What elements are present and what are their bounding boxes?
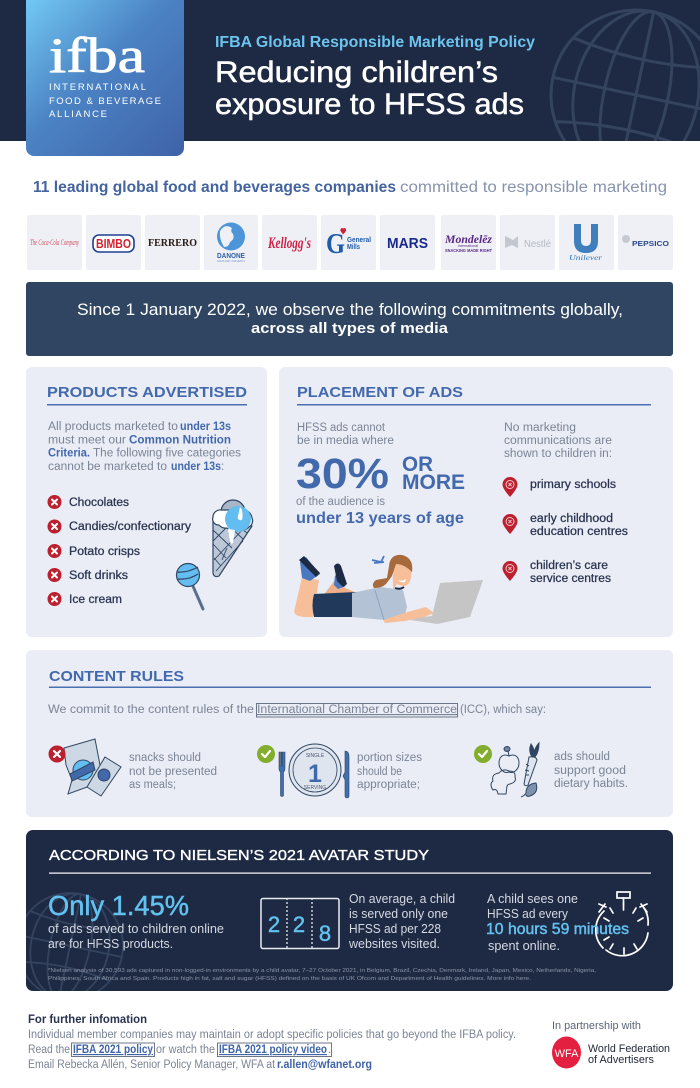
- venues intro: communications are: [504, 435, 612, 447]
- venue: children's care service centres: [502, 560, 611, 585]
- further information: [28, 1014, 516, 1071]
- intro line: [33, 179, 667, 196]
- rule: snacks: snacks should: [129, 752, 201, 764]
- title: [215, 56, 524, 121]
- rule: dietary habits: ads should: [554, 751, 610, 763]
- logo: Mondelez: [441, 215, 496, 270]
- venue: children's care service centres: children’s care: [530, 560, 608, 572]
- company logos row: [27, 215, 673, 270]
- icon: faint globe: [26, 892, 124, 991]
- logo: Unilever: Unilever: [569, 253, 602, 262]
- logo: Mondelez: International: [458, 244, 478, 248]
- rule: snacks: [48, 739, 217, 796]
- rule: snacks: as meals;: [129, 779, 176, 791]
- list: banned categories: Ice cream: [69, 594, 122, 606]
- partnership: WFA: In partnership with: [552, 1020, 641, 1032]
- ICC commitment sentence: (ICC), which say:: [460, 704, 546, 716]
- list: banned categories: Soft drinks: [69, 570, 128, 582]
- further information: For further infomation: [28, 1014, 147, 1026]
- venues intro: shown to children in:: [504, 448, 612, 460]
- stat: 1.45 percent: are for HFSS products.: [48, 937, 173, 951]
- commitment banner: [26, 282, 673, 356]
- title: exposure to HFSS ads: [215, 88, 524, 121]
- logo block: IFBA: ALLIANCE: [49, 109, 107, 120]
- logo: Danone: [204, 215, 258, 270]
- stat: 1 ad per 228 websites: is served only one: [349, 907, 448, 921]
- logo: Unilever: [559, 215, 614, 270]
- rule: portion sizes: appropriate;: [357, 779, 420, 791]
- products paragraph: [48, 421, 241, 473]
- logo: Mars: [380, 215, 435, 270]
- list: banned categories: Chocolates: [69, 497, 129, 509]
- stat: 30 percent: MORE: [402, 471, 465, 494]
- logo: WFA: WFA: [555, 1048, 579, 1060]
- products paragraph: All products marketed to: [48, 421, 178, 433]
- stat: 30 percent: 30%: [296, 450, 389, 498]
- logo: Danone: DANONE: [217, 251, 245, 260]
- icon: globe: [550, 8, 700, 141]
- stat: 10 hours 59 minutes: spent online.: [488, 939, 560, 953]
- logo: Ferrero: FERRERO: [148, 238, 197, 249]
- venue: early childhood education centres: education centres: [530, 526, 628, 538]
- further information: or watch the: [156, 1044, 215, 1056]
- rule: dietary habits: support good: [554, 765, 626, 777]
- logo: Coca-Cola: [27, 215, 82, 270]
- commitment banner: across all types of media: [251, 320, 449, 337]
- logo: General Mills: General: [347, 237, 371, 244]
- further information: IFBA 2021 policy: [73, 1044, 154, 1056]
- icon: stopwatch: [596, 892, 648, 956]
- icon: 228 counter: 8: [319, 921, 331, 946]
- stat: 1 ad per 228 websites: websites visited.: [348, 937, 440, 951]
- logo: General Mills: G: [326, 229, 345, 260]
- logo: Kellogg's: Kellogg's: [267, 235, 311, 252]
- panel: Nielsen study: [26, 830, 673, 991]
- ICC commitment sentence: We commit to the content rules of the: [48, 704, 254, 716]
- logo: Danone: ONE PLANET. ONE HEALTH: [217, 259, 245, 263]
- logo: Nestle: Nestlé: [524, 238, 551, 250]
- logo: Mars: MARS: [387, 235, 428, 252]
- venue: early childhood education centres: [502, 513, 628, 538]
- logo block: IFBA: ifba: [49, 27, 145, 83]
- stat: 1.45 percent: of ads served to children online: [48, 922, 224, 936]
- stat: 30 percent: under 13 years of age: [296, 510, 464, 527]
- heading: Nielsen study: ACCORDING TO NIELSEN’S 2021 AVATAR STUDY: [49, 847, 429, 864]
- icon: snack packs: [64, 739, 121, 796]
- products paragraph: under 13s: [180, 421, 231, 433]
- further information: .: [328, 1044, 331, 1056]
- stat: 1.45 percent: Only 1.45%: [48, 890, 189, 921]
- logo: Bimbo: [86, 215, 141, 270]
- commitment banner: Since 1 January 2022, we observe the following commitments globally,: [77, 301, 623, 319]
- intro line: 11 leading global food and beverages companies: [33, 179, 396, 196]
- rule: snacks: not be presented: [129, 766, 217, 778]
- header band: [0, 0, 700, 141]
- logo: Bimbo: BIMBO: [96, 237, 131, 251]
- rule: portion sizes: [257, 744, 422, 798]
- stat: 30 percent: OR: [402, 453, 433, 476]
- logo: Kellogg's: [262, 215, 317, 270]
- footnote: Philippines, South Africa and Spain. Products high in fat, salt and sugar (HFSS) defined on the basis of UK Ofcom and Department of Health guidelines. More info here.: [48, 976, 532, 982]
- heading: placement of ads: PLACEMENT OF ADS: [297, 384, 463, 401]
- intro line: committed to responsible marketing: [400, 179, 667, 196]
- stat: 10 hours 59 minutes: 10 hours 59 minutes: [486, 921, 629, 938]
- panel: content rules: [26, 650, 673, 817]
- stat: 1 ad per 228 websites: [261, 892, 455, 951]
- venues intro: [504, 422, 612, 460]
- venue: early childhood education centres: early childhood: [530, 513, 613, 525]
- ICC commitment sentence: International Chamber of Commerce: [257, 704, 457, 716]
- products paragraph: The following five categories: [93, 448, 241, 460]
- list: banned categories: Candies/confectionary: [69, 521, 191, 533]
- stat: 30 percent: HFSS ads cannot: [297, 422, 386, 434]
- footnote: [48, 968, 597, 982]
- icon: 228 counter: 2: [293, 912, 305, 937]
- icon: check badge: [257, 745, 275, 763]
- stat: 10 hours 59 minutes: A child sees one: [487, 892, 578, 906]
- stat: 1 ad per 228 websites: HFSS ad per 228: [349, 922, 441, 936]
- icon: lollipop: [176, 564, 203, 609]
- logo: Mondelez: SNACKING MADE RIGHT: [445, 248, 492, 253]
- logo: Ferrero: [145, 215, 200, 270]
- further information: Email Rebecka Allén, Senior Policy Manager, WFA at: [28, 1059, 276, 1071]
- footnote: *Nielsen analysis of 30,593 ads captured in non-logged-in environments by a child avatar, 7–27 October 2021, in Belgium, Brazil, Czechia, Denmark, Ireland, Japan, Mexico, Netherlands, Nigeria,: [48, 968, 597, 974]
- logo: Mondelez: Mondelēz: [444, 232, 492, 246]
- products paragraph: under 13s: [171, 461, 221, 473]
- products paragraph: must meet our: [48, 434, 126, 446]
- icon: check badge: [474, 745, 492, 763]
- further information: IFBA 2021 policy video: [219, 1044, 327, 1056]
- icon: plate with cutlery: [279, 744, 349, 798]
- logo: WFA: of Advertisers: [588, 1054, 654, 1066]
- further information: Individual member companies may maintain or adopt specific policies that go beyond the IFBA policy.: [28, 1029, 516, 1041]
- logo: WFA: [552, 1036, 670, 1068]
- panel: placement of ads: [279, 367, 673, 637]
- stat: 30 percent: of the audience is: [296, 496, 385, 508]
- venue: primary schools: primary schools: [530, 479, 616, 491]
- logo block: IFBA: FOOD & BEVERAGE: [49, 96, 161, 107]
- list: banned categories: [48, 495, 191, 606]
- heading: products advertised: PRODUCTS ADVERTISED: [47, 384, 247, 401]
- stat: 30 percent: [296, 422, 465, 527]
- rule: dietary habits: [474, 743, 628, 797]
- products paragraph: Criteria.: [48, 448, 90, 460]
- logo: Coca-Cola: The Coca-Cola Company: [30, 238, 79, 247]
- panel: products advertised: [26, 367, 267, 637]
- rule: portion sizes: portion sizes: [357, 752, 422, 764]
- further information: r.allen@wfanet.org: [277, 1059, 372, 1071]
- products paragraph: Common Nutrition: [129, 434, 231, 446]
- logo: General Mills: Mills: [347, 244, 360, 251]
- list: banned categories: Potato crisps: [69, 546, 140, 558]
- subtitle: IFBA Global Responsible Marketing Policy: [215, 34, 535, 51]
- icon: plate with cutlery: SERVING: [304, 785, 326, 791]
- rule: dietary habits: dietary habits.: [554, 778, 628, 790]
- logo: PepsiCo: [618, 215, 673, 270]
- logo block: IFBA: [26, 0, 184, 156]
- partnership: WFA: [552, 1020, 670, 1068]
- logo: PepsiCo: PEPSICO: [632, 239, 669, 248]
- logo: Nestle: [500, 215, 555, 270]
- venue: children's care service centres: service centres: [530, 573, 611, 585]
- stat: 1 ad per 228 websites: On average, a child: [349, 892, 455, 906]
- icon: plate with cutlery: 1: [308, 760, 322, 788]
- venue: primary schools: [502, 477, 616, 497]
- venues intro: No marketing: [504, 422, 576, 434]
- icon: 228 counter: [261, 898, 339, 949]
- stat: 10 hours 59 minutes: [486, 892, 648, 956]
- rule: portion sizes: should be: [357, 766, 402, 778]
- products paragraph: :: [221, 461, 224, 473]
- logo: WFA: World Federation: [588, 1043, 670, 1055]
- icon: 228 counter: 2: [268, 912, 280, 937]
- stat: 10 hours 59 minutes: HFSS ad every: [487, 907, 569, 921]
- heading: content rules: CONTENT RULES: [49, 668, 184, 685]
- further information: Read the: [28, 1044, 70, 1056]
- icon: fruit and vegetables: [491, 743, 539, 797]
- stat: 30 percent: be in media where: [297, 435, 394, 447]
- icon: plate with cutlery: SINGLE: [306, 753, 325, 759]
- ICC commitment sentence: [48, 704, 546, 717]
- title: Reducing children’s: [215, 56, 498, 89]
- logo block: IFBA: INTERNATIONAL: [49, 82, 146, 93]
- illustration: girl using laptop: [294, 555, 483, 624]
- products paragraph: cannot be marketed to: [48, 461, 167, 473]
- stat: 1.45 percent: [48, 890, 224, 951]
- icon: ice cream cone: [213, 500, 253, 577]
- logo: General Mills: [321, 215, 376, 270]
- icon: cross badge: [48, 746, 66, 762]
